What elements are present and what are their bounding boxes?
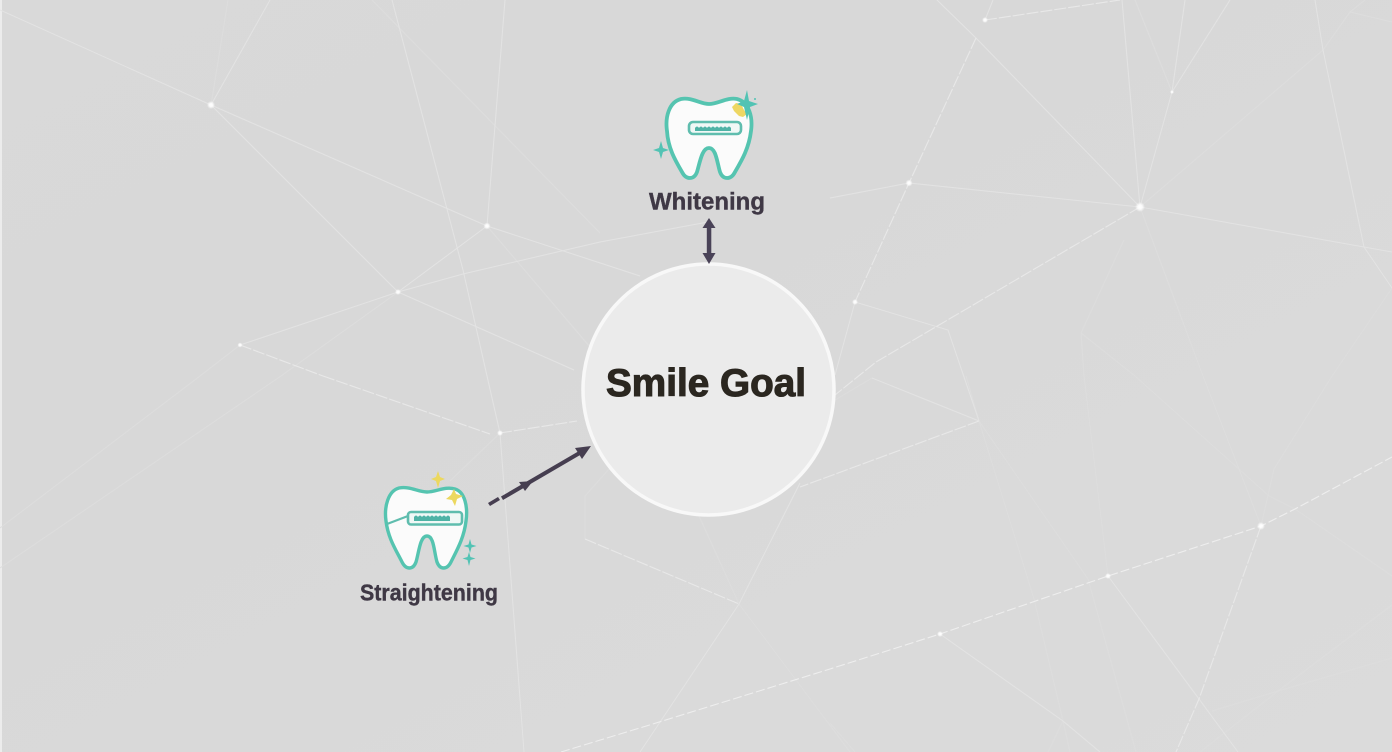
icon: straightening tooth	[386, 471, 476, 568]
label: Whitening: Whitening	[649, 188, 765, 216]
arrow: straightening to goal	[488, 446, 591, 506]
icon: whitening tooth	[653, 90, 758, 178]
network nodes	[207, 17, 1265, 637]
arrow: whitening to goal	[702, 218, 716, 264]
label: Straightening: Straightening	[360, 580, 498, 606]
heading: Smile Goal: Smile Goal	[606, 362, 806, 405]
central circle: Smile Goal	[583, 264, 834, 515]
